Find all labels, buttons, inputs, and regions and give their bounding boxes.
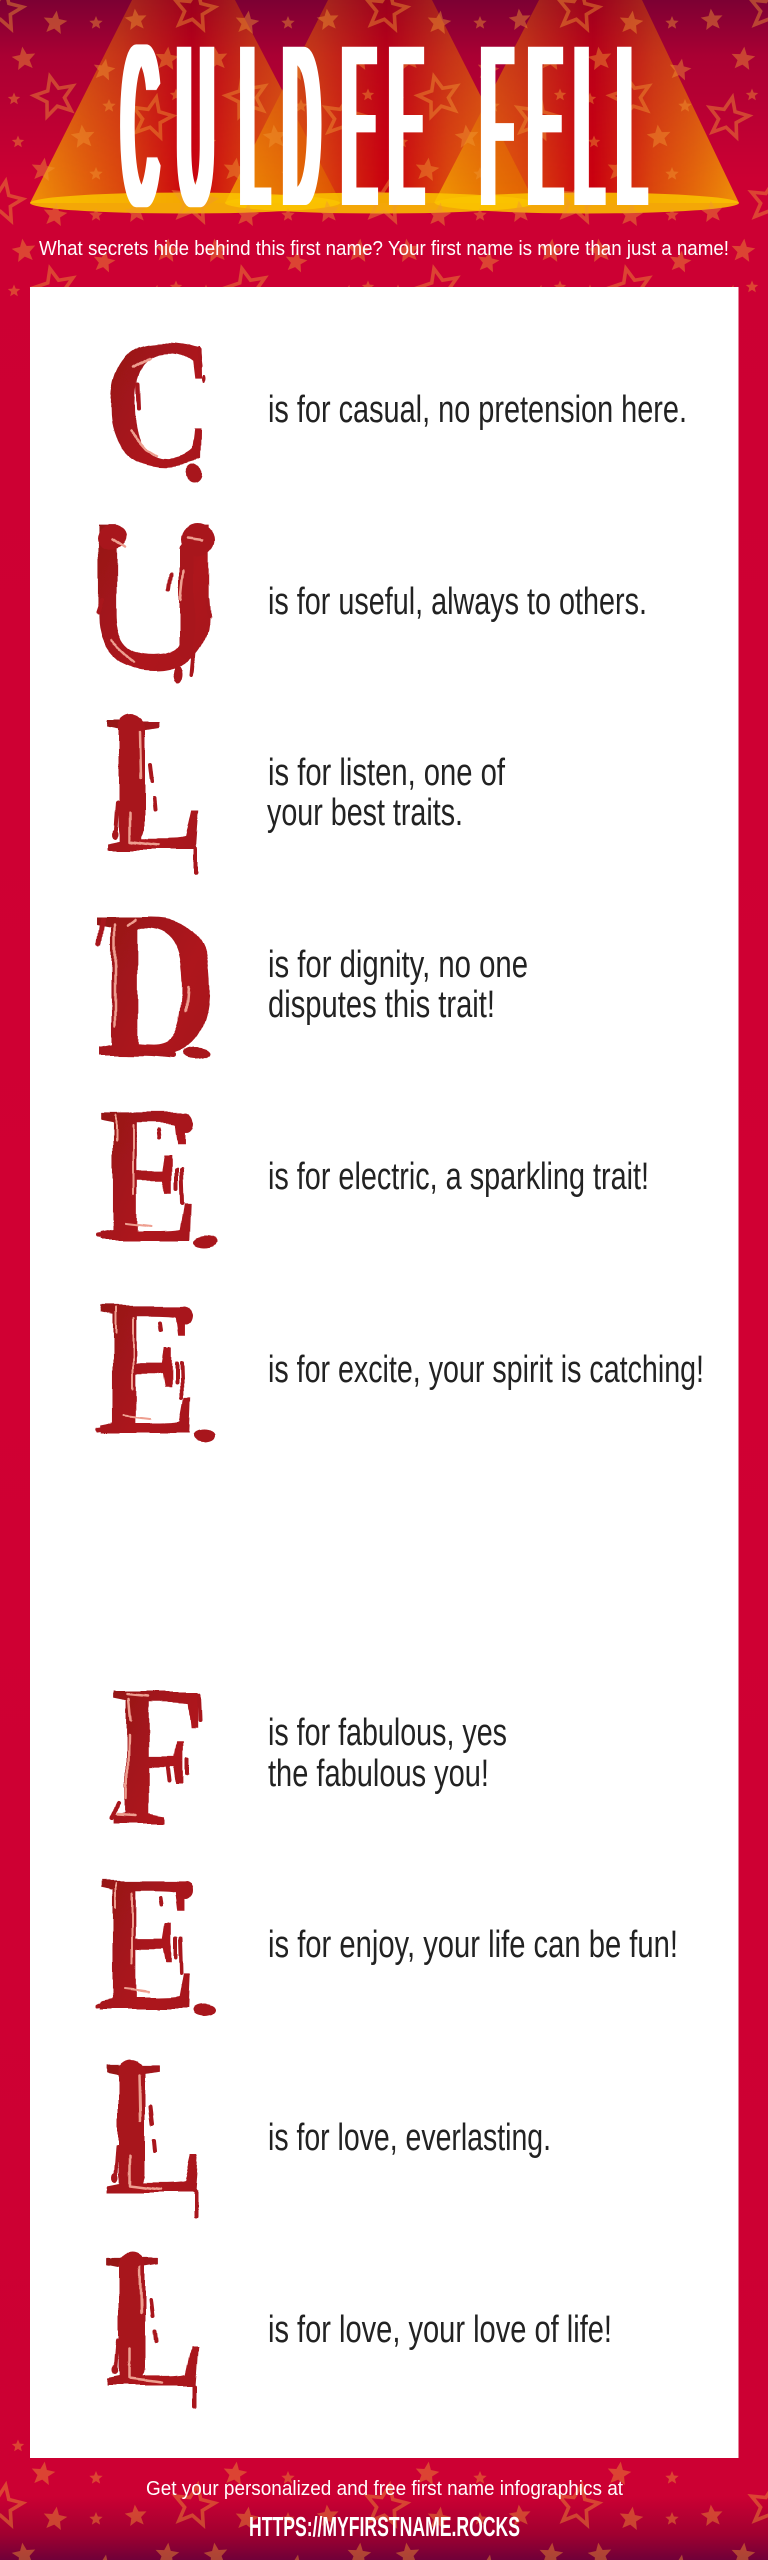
- spotlight cone: middle: [225, 0, 535, 203]
- subtitle: What secrets hide behind this first name? Your first name is more than just a name!: [39, 238, 729, 260]
- letter icon: L: L: [104, 674, 205, 893]
- letter icon: E: E: [98, 1259, 199, 1475]
- text: L: is for love, your love of life!: [268, 2309, 612, 2351]
- text: U: is for useful, always to others.: [268, 581, 647, 623]
- text: L: your best traits.: [267, 792, 463, 834]
- text: L: [267, 752, 505, 834]
- spotlight cone: right: [434, 0, 739, 203]
- letter icon: E: E: [98, 1066, 199, 1282]
- footer url: HTTPS://MYFIRSTNAME.ROCKS: [249, 2511, 520, 2542]
- panel: letters: [30, 287, 738, 2458]
- text: F: the fabulous you!: [268, 1753, 489, 1795]
- text: F: is for fabulous, yes: [268, 1712, 507, 1754]
- letter icon: L: L: [104, 2019, 205, 2236]
- text: F: [268, 1712, 507, 1795]
- pool: left: [30, 192, 340, 214]
- letter icon: E: E: [98, 1834, 199, 2050]
- footer text: Get your personalized and free first name infographics at: [146, 2478, 623, 2500]
- letter icon: F: F: [110, 1645, 204, 1867]
- text: D: is for dignity, no one: [268, 944, 528, 986]
- spotlight cone: left: [30, 0, 341, 203]
- pool: right: [435, 192, 739, 214]
- text: D: disputes this trait!: [268, 984, 495, 1026]
- letter icon: D: D: [94, 868, 218, 1101]
- pool: middle: [225, 192, 535, 214]
- text: L: is for listen, one of: [268, 752, 505, 794]
- text: E: is for electric, a sparkling trait!: [268, 1156, 649, 1198]
- spotlights: [30, 0, 739, 203]
- text: L: is for love, everlasting.: [268, 2117, 551, 2159]
- stars: bottom: [0, 2436, 768, 2560]
- letter icon: U: U: [83, 481, 224, 712]
- spotlight pools: [30, 192, 739, 214]
- stars: top: [0, 0, 768, 300]
- letter icon: C: C: [103, 303, 213, 505]
- text: D: [268, 944, 528, 1026]
- letter icon: L: L: [104, 2211, 205, 2428]
- title: CULDEE FELL: [123, 0, 645, 255]
